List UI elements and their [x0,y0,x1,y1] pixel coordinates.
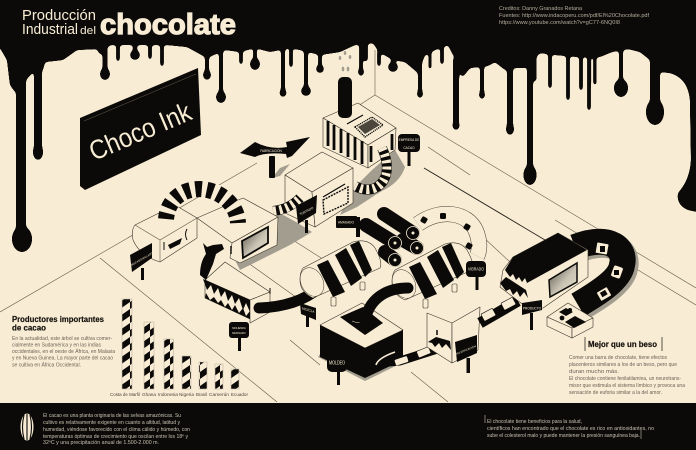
sign: Descascarillado [130,243,153,280]
curved track [418,213,479,256]
credits: Creditos: Danny Granados Retana [499,6,582,12]
machine: packaging [500,233,588,310]
drum 2 [388,243,473,308]
sign: Amasado: AMASADO [338,220,354,224]
machine: box D [427,307,480,363]
sign: Mezcla: MEZCLA [302,306,316,314]
conveyor [376,345,450,366]
heading: productores [12,315,105,332]
sign: Empresa de cacao: CACAO [403,146,415,150]
title: chocolate [100,9,236,41]
sign: Solidificación: SOLIDIFICACIÓN [454,343,476,356]
text: mejor que un beso: sensación de euforia similar a la del amor. [569,390,662,396]
text: productores: cialmente en Sudamérica y en las indias [12,342,101,348]
text: mejor que un beso [569,355,685,396]
text: mejor que un beso: El chocolate contiene fenilatilamina, un neurotrans- [569,376,681,382]
sign: Moldeo [327,353,347,385]
sign: Moldeo: MOLDEO [329,360,345,366]
machine: box A [132,205,197,262]
sign: Mezcla [300,303,316,327]
text: cacao origin: humedad, viéndose favorecido con el clima cálido y húmedo, con [43,427,190,433]
drum 1 [296,241,381,306]
machine: chimney box [323,77,396,168]
sign: Vibrado: VIBRADO [468,266,484,272]
bar chart: producers: Nigeria [179,392,194,398]
bar chart: producers: Ghana [142,392,156,398]
shadows [236,150,405,270]
text: cacao origin [43,413,190,446]
sign: Refinado: REFINADO [232,331,246,335]
sign: Vibrado [466,261,486,290]
credits: https://www.youtube.com/watch?v=gC77-6NQ0I8 [499,20,620,26]
text: health benefits: científicos han encontrado que el chocolate es rico en antioxidantes, no [487,426,654,432]
sign: Descascarillado: DESCASCARILLADO [130,251,153,267]
sign: Empresa de cacao: EMPRESA DE [399,138,419,142]
text: health benefits: sube el colesterol malo y puede mantener la presión sanguínea baja. [487,433,640,439]
title: del [80,25,96,37]
text: cacao origin: temperaturas óptimas de crecimiento que oscilan entre los 18º y [43,434,188,440]
hose [259,288,319,308]
bar chart: producers [110,299,248,398]
heading: productores: de cacao [12,324,46,332]
text: productores: En la actualidad, este árbol se cultiva comer- [12,336,112,342]
bar chart: producers: Brasil [196,392,207,398]
sign: Tostado: TOSTADO [299,206,315,216]
heading: mejor que un beso: Mejor que un beso [588,340,657,349]
sign: Solidificación [454,335,477,373]
box of chocolates [547,303,593,338]
bar chart: producers: Ecuador [231,392,248,398]
text: productores: se cultiva en África Occidental. [12,362,81,368]
sign: Producto: PRODUCTO [523,306,542,310]
text: cacao origin: El cacao es una planta originaria de las selvas amazónicas. Su [43,413,181,419]
striped tube [355,148,387,190]
sign: Fabricación arrow [240,137,310,178]
bar chart: producers: Camerún [209,392,229,398]
text: mejor que un beso: misor que estimula el sistema límbico y provoca una [569,383,685,389]
text: productores [12,336,115,368]
sign: Choco Ink [80,68,201,190]
hose to mold [365,288,408,322]
sign: Amasado [336,216,360,237]
sign: Choco Ink: Choco Ink [85,97,196,167]
title: Industrial [22,22,78,38]
small black cylinders [366,214,424,266]
credits: Fuentes: http://www.indacoperu.com/pdf/El%20Chocolate.pdf [499,13,650,19]
heading: productores: Productores importantes [12,315,105,324]
machine: box B with screen [197,198,278,263]
machine: mold box [318,303,408,381]
bar chart: producers: Costa de Marfil [110,392,140,398]
title [22,8,236,41]
text: health benefits [485,415,654,439]
arch striped tube [166,189,238,223]
sign: Empresa de cacao [398,134,420,166]
chocolate drips [0,0,696,252]
bottom band [0,403,696,450]
text: productores: y en Nueva Guinea. La mayor parte del cacao [12,356,113,362]
icon: smoke [339,51,351,71]
text: cacao origin: cultivo es relativamente exigente en cuanto a altitud, latitud y [43,420,180,426]
sign: Tostado [296,195,317,233]
machine: box C with teeth [200,243,270,323]
icon: cacao pod [20,414,34,440]
text: mejor que un beso: duran mucho más. [569,369,619,375]
sign: Refinado: MOLIENDA [232,326,246,330]
text: health benefits: El chocolate tiene beneficios para la salud, [487,419,582,425]
striped tube small [273,198,300,211]
text: cacao origin: 32ºC y una precipitación anual de 1.500-2.000 m. [43,440,159,446]
bar chart: producers: Indonesia [158,392,178,398]
sign: Producto [522,300,542,330]
heading: mejor que un beso [585,337,662,351]
conveyor right [480,297,518,323]
text: mejor que un beso: placenteros similares a los de un beso, pero que [569,362,677,368]
text: productores: occidentales, en el oeste de África, en Malasia [12,348,115,355]
credits [499,6,650,26]
machine: roaster box [285,152,353,227]
text: mejor que un beso: Comer una barra de chocolate, tiene efectos [569,355,667,361]
sign: Refinado [229,322,249,351]
U-shaped black belt [575,242,626,308]
title: Producción [22,8,96,24]
sign: Fabricación arrow: FABRICACIÓN [260,148,283,153]
